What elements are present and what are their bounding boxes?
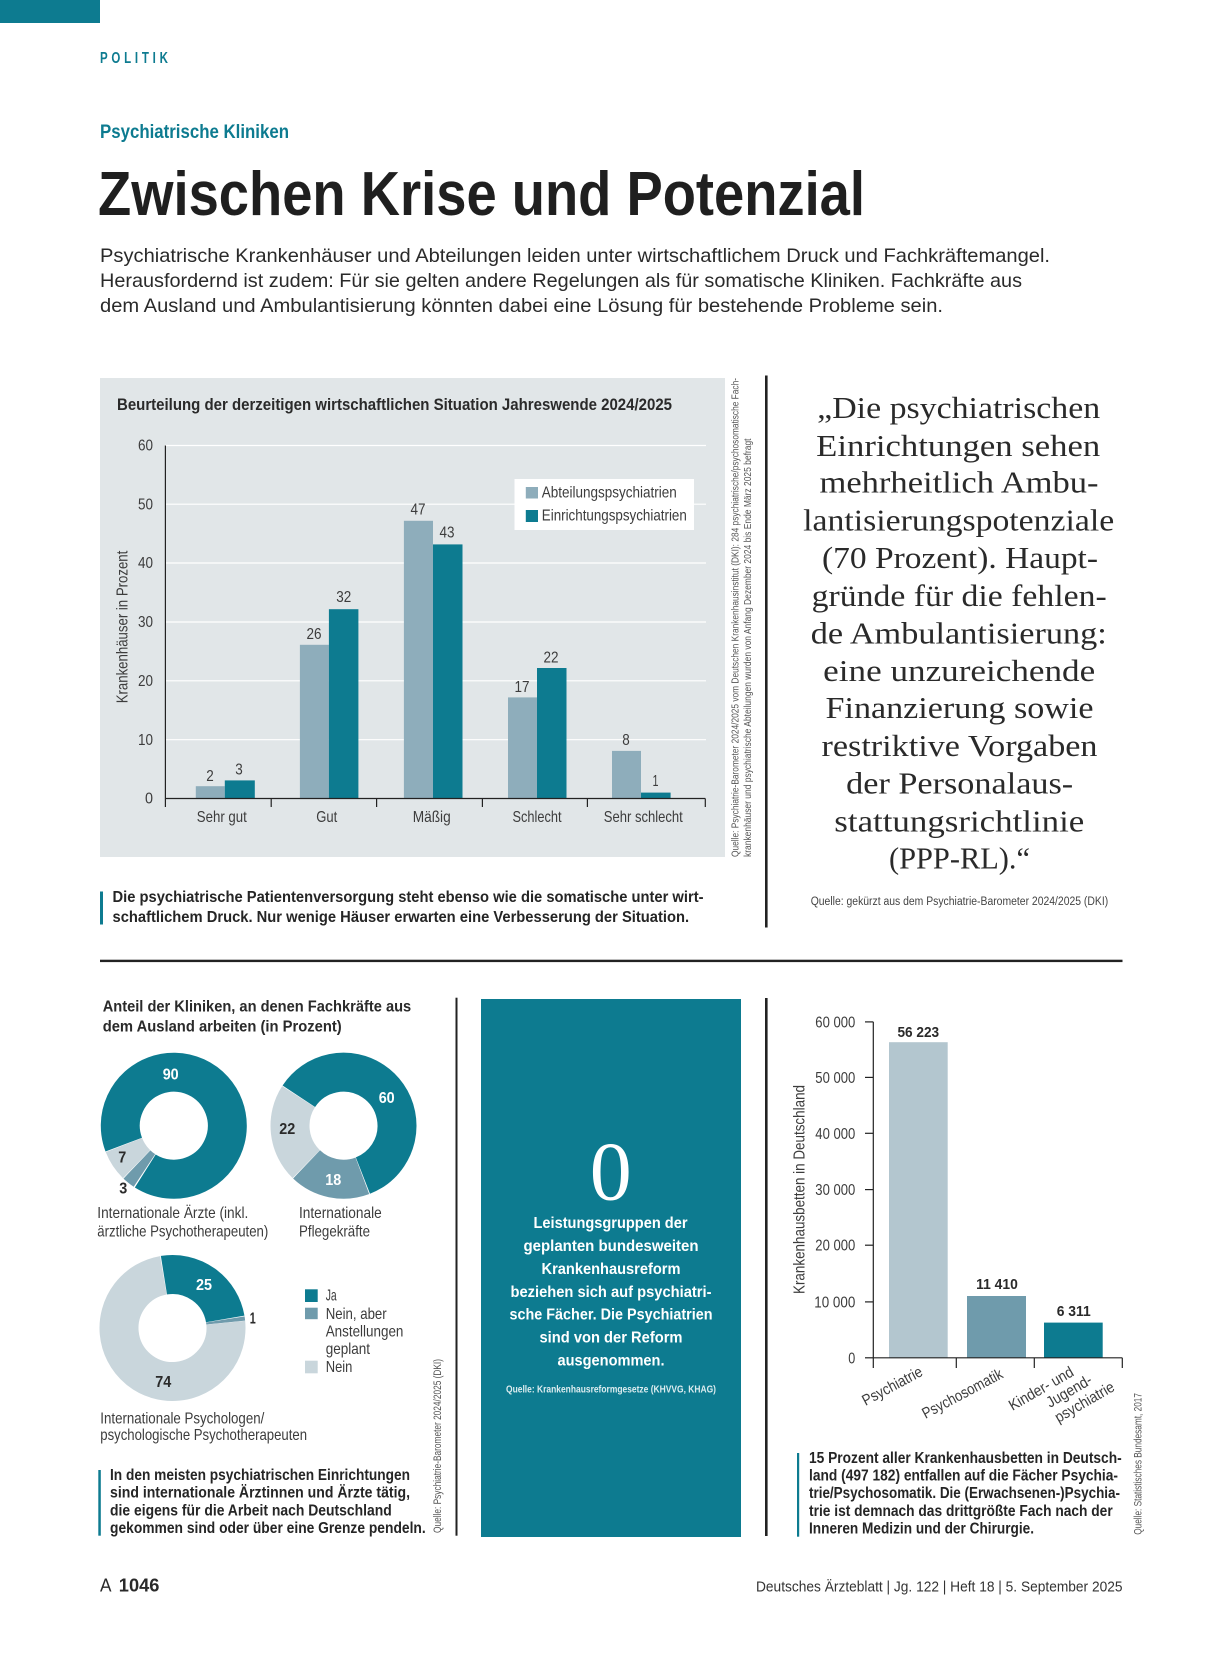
y axis labels: 30 000 [815,1182,856,1199]
bar values: 56 223 [897,1024,939,1041]
axes [865,1022,1122,1368]
bar value labels: 26 [306,626,322,643]
donut legend [305,1288,403,1376]
bar value labels: 17 [514,679,530,696]
intro text: Psychiatrische Krankenhäuser und Abteilungen leiden unter wirtschaftlichem Druck und Fachkräftemangel. [100,245,1050,267]
panel: economic situation bar chart [100,378,725,857]
donut legend: Nein [326,1359,352,1376]
caption: Psychologen: Internationale Psychologen/ [100,1410,265,1427]
legend: Abteilungspsychiatrien [542,484,677,502]
caption: Ärzte [97,1204,268,1240]
bar value labels: 3 [235,762,243,779]
bar values: 11 410 [976,1276,1018,1293]
panel: foreign staff donuts [97,998,444,1537]
donut: Psychologen: 25 [196,1277,212,1294]
y axis labels: 30 [138,614,153,631]
donut: Pflegekräfte [268,1050,419,1201]
rotated category labels [859,1364,1118,1426]
source note: bar chart: krankenhäuser und psychiatrische Abteilungen wurden von Anfang Dezember 2024 bis Ende März 2025 befragt [742,438,754,857]
quote: gründe für die fehlen- [812,578,1107,613]
y axis labels: 10 [138,732,153,749]
y axis labels [138,438,153,808]
donut: Psychologen [111,1267,256,1391]
quote: eine unzureichende [823,653,1095,688]
quote: mehrheitlich Ambu- [820,464,1098,500]
panel: key figure [481,999,741,1537]
intro text: dem Ausland und Ambulantisierung könnten dabei eine Lösung für bestehende Probleme sein. [100,295,943,317]
donut legend: Anstellungen [326,1324,403,1341]
caption: Psychologen: psychologische Psychotherapeuten [100,1427,307,1444]
donut: Ärzte: 3 [119,1181,128,1198]
donut: Pflegekräfte: 22 [279,1121,295,1138]
y axis labels: 40 000 [815,1126,856,1143]
caption: Pflegekräfte [299,1205,382,1240]
quote: der Personalaus- [846,766,1073,800]
category labels: Gut [316,809,338,826]
source note: donuts: Quelle: Psychiatrie-Barometer 2024/2025 (DKI) [432,1359,444,1533]
quote: „Die psychiatrischen [817,390,1101,425]
y axis title: Krankenhäuser in Prozent [114,550,132,703]
footer: page number [100,1576,159,1596]
bar value labels: 43 [440,524,455,542]
quote: Einrichtungen sehen [816,428,1101,463]
quote: lantisierungspotenziale [803,502,1114,538]
y axis labels: 60 [138,438,153,454]
bar value labels: 22 [544,650,559,667]
rotated category labels: psychiatrie [1052,1379,1118,1426]
section label: POLITIK [100,48,172,66]
donut: Psychologen: 74 [155,1374,172,1391]
key figure text: sind von der Reform [540,1330,682,1347]
bar value labels: 8 [622,732,630,749]
category labels: Sehr gut [197,809,247,826]
bar value labels: 32 [336,589,351,606]
donut legend: Ja [326,1288,337,1305]
quote: de Ambulantisierung: [811,616,1107,650]
key figure text [510,1215,712,1370]
y axis labels [814,1014,856,1367]
rotated category labels: Jugend- [1044,1372,1095,1411]
callout: patient care: Die psychiatrische Patientenversorgung steht ebenso wie die somatische unter wirt- [112,889,704,906]
caption: Ärzte: Internationale Ärzte (inkl. [97,1204,248,1222]
quote: stattungsrichtlinie [834,804,1084,838]
donut heading [103,998,411,1035]
callout: international doctors: die eigens für die Arbeit nach Deutschland [110,1502,392,1520]
y axis labels: 0 [145,791,153,808]
rotated category labels: Psychosomatik [919,1366,1006,1423]
kicker: Psychiatrische Kliniken [100,121,289,143]
bars: Einrichtungspsychiatrien [225,544,671,798]
bar value labels [206,502,659,790]
footer: publication info: Deutsches Ärzteblatt | Jg. 122 | Heft 18 | 5. September 2025 [756,1579,1122,1596]
source note: hospital beds: Quelle: Statistisches Bundesamt, 2017 [1132,1393,1144,1535]
key figure text: ausgenommen. [558,1353,664,1370]
intro text: Herausfordernd ist zudem: Für sie gelten andere Regelungen als für somatische Kliniken. Fachkräfte aus [100,270,1022,292]
callout: international doctors: sind internationale Ärztinnen und Ärzte tätig, [110,1484,410,1502]
chart title: Beurteilung der derzeitigen wirtschaftlichen Situation Jahreswende 2024/2025 [117,396,672,414]
donut: Pflegekräfte: 60 [379,1090,395,1107]
footer: page number: A [100,1576,112,1596]
category labels: Sehr schlecht [604,809,683,826]
y axis labels: 0 [848,1350,856,1367]
caption: Pflegekräfte: Pflegekräfte [299,1224,370,1240]
key figure text: sche Fächer. Die Psychiatrien [510,1306,712,1324]
top accent bar [0,0,100,23]
y axis labels: 40 [138,555,153,572]
bar value labels: 1 [652,773,659,790]
source note: bar chart [730,378,754,857]
callout: hospital beds [797,1450,1122,1538]
footer: page number: 1046 [119,1576,159,1596]
key figure text: Krankenhausreform [542,1261,680,1278]
caption: Pflegekräfte: Internationale [299,1205,382,1222]
donut heading: Anteil der Kliniken, an denen Fachkräfte aus [103,998,411,1015]
donut heading: dem Ausland arbeiten (in Prozent) [103,1018,342,1035]
bar value labels: 2 [206,768,214,785]
y axis labels: 10 000 [814,1294,856,1311]
donut: Pflegekräfte: 18 [325,1172,342,1189]
category labels [197,809,683,826]
y axis labels: 20 [138,673,153,690]
quote: (PPP-RL).“ [889,840,1030,876]
bar: Psychiatrie [889,1042,948,1358]
quote source: Quelle: gekürzt aus dem Psychiatrie-Barometer 2024/2025 (DKI) [811,896,1108,908]
donut legend: Nein, aber [326,1306,387,1323]
intro text [100,245,1050,317]
donut: Psychologen: 1 [250,1311,256,1328]
y axis labels: 20 000 [815,1238,856,1255]
callout: hospital beds: trie ist demnach das drittgrößte Fach nach der [809,1503,1113,1520]
quote [803,390,1114,876]
quote: (70 Prozent). Haupt- [822,540,1098,575]
donut: Ärzte: 7 [118,1150,126,1167]
callout: hospital beds: land (497 182) entfallen auf die Fächer Psychia- [809,1468,1118,1485]
title: Zwischen Krise und Potenzial [98,160,865,229]
quote: Finanzierung sowie [826,690,1094,725]
source note: bar chart: Quelle: Psychiatrie-Barometer 2024/2025 vom Deutschen Krankenhausinstitut (DKI): 284 psychiatrische/psychosomatische Fach- [730,378,742,857]
caption: Ärzte: ärztliche Psychotherapeuten) [97,1224,268,1240]
callout: hospital beds: 15 Prozent aller Krankenhausbetten in Deutsch- [809,1450,1122,1467]
callout: international doctors [98,1467,426,1537]
donut: Ärzte: 90 [163,1066,179,1084]
callout: hospital beds: trie/Psychosomatik. Die (Erwachsenen-)Psychia- [809,1485,1120,1502]
key figure text: geplanten bundesweiten [524,1238,698,1255]
y axis labels: 50 [138,496,153,513]
y axis labels: 60 000 [815,1014,856,1031]
callout: international doctors: In den meisten psychiatrischen Einrichtungen [110,1467,410,1484]
rotated category labels: Kinder- und [1006,1364,1077,1414]
rotated category labels: Psychiatrie [859,1364,926,1410]
category labels: Mäßig [413,809,451,826]
bar values: 6 311 [1057,1303,1091,1320]
big number: 0 [590,1126,632,1218]
bar values [897,1024,1091,1320]
key figure source: Quelle: Krankenhausreformgesetze (KHVVG, KHAG) [506,1384,716,1395]
bars: Abteilungspsychiatrien [196,521,641,798]
category labels: Schlecht [512,809,562,826]
key figure text: beziehen sich auf psychiatri- [510,1284,712,1301]
y axis title: Krankenhausbetten in Deutschland [791,1085,808,1294]
legend: Einrichtungspsychiatrien [542,508,687,525]
callout: patient care: schaftlichem Druck. Nur wenige Häuser erwarten eine Verbesserung der Situation. [112,909,689,926]
callout: hospital beds: Inneren Medizin und der Chirurgie. [809,1521,1034,1538]
callout: international doctors: gekommen sind oder über eine Grenze pendeln. [110,1520,426,1537]
bar value labels: 47 [410,502,426,518]
donut: Ärzte [98,1050,249,1201]
bar: Kinder- und Jugendpsychiatrie [1044,1323,1103,1358]
key figure text: Leistungsgruppen der [534,1215,688,1232]
caption: Psychologen [100,1410,307,1444]
axes [165,446,705,807]
quote: restriktive Vorgaben [822,728,1098,763]
panel: hospital beds bar chart [791,1014,1144,1538]
y axis labels: 50 000 [815,1070,856,1087]
bar: Psychosomatik [967,1296,1026,1358]
callout: patient care [100,889,704,926]
donut legend: geplant [326,1341,370,1358]
legend [514,479,694,530]
